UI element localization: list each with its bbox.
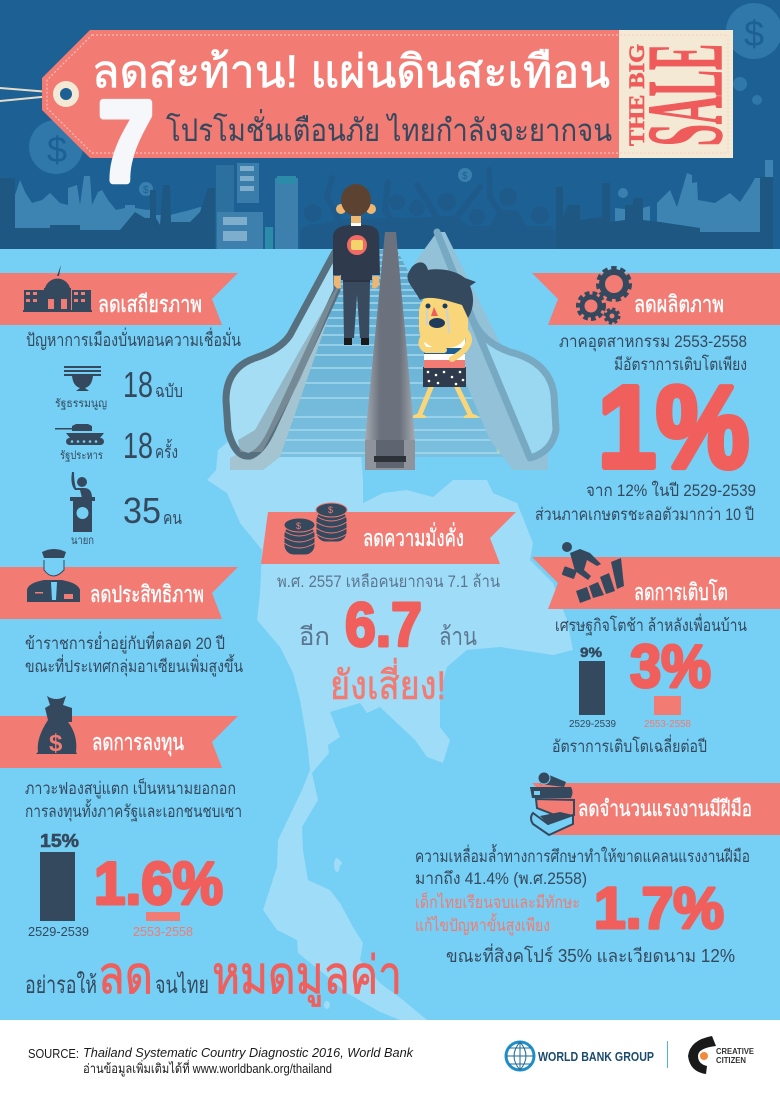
logo: World Bank Group xyxy=(506,1042,654,1070)
banner: investment: ลดการลงทุน xyxy=(92,729,184,756)
banner: stability: ลดเสถียรภาพ xyxy=(98,291,202,317)
banner: wealth: ลดความมั่งคั่ง xyxy=(363,522,464,551)
highlighted text xyxy=(415,891,580,936)
bar chart: economic growth: 2529-2539 xyxy=(569,719,616,730)
icon: tank xyxy=(55,424,104,445)
panel: reduced stability xyxy=(0,265,241,547)
body text xyxy=(25,777,242,822)
heading line one: ลดสะท้าน! แผ่นดินสะเทือน xyxy=(92,46,610,97)
icon: coin stacks: $ xyxy=(328,505,333,515)
crying boy xyxy=(407,262,478,417)
body text: ภาคอุตสาหกรรม 2553-2558 xyxy=(559,332,747,352)
highlighted text: เด็กไทยเรียนจบและมีทักษะ xyxy=(415,891,580,912)
source text: อ่านข้อมูลเพิ่มเติมได้ที่ www.worldbank.org/thailand xyxy=(83,1060,332,1077)
dollar coins in the sky: $ xyxy=(744,13,764,54)
closing slogan: หมดมูลค่า xyxy=(212,947,402,1007)
label: prime minister: นายก xyxy=(71,535,94,547)
panel: reduced productivity xyxy=(532,269,780,524)
map of Thailand xyxy=(207,440,573,1020)
closing slogan: อย่ารอให้ xyxy=(25,971,97,999)
safety strips xyxy=(274,400,500,457)
icon: parliament xyxy=(23,265,92,312)
logo: World Bank Group: WORLD BANK GROUP xyxy=(538,1049,654,1064)
banner: growth: ลดการเติบโต xyxy=(634,579,728,605)
the big sale stamp: THE BIG xyxy=(624,44,649,146)
steps xyxy=(270,250,510,457)
icon: coin stacks: $ xyxy=(296,521,301,531)
panel: reduced growth xyxy=(532,542,780,756)
body text: มีอัตราการเติบโตเพียง xyxy=(614,354,747,374)
stat: 18 coups: ครั้ง xyxy=(155,439,178,462)
dollar coins in the sky: $ xyxy=(462,171,468,182)
banner: productivity: ลดผลิตภาพ xyxy=(634,291,724,317)
banner: efficiency: ลดประสิทธิภาพ xyxy=(90,581,204,607)
crowd silhouettes xyxy=(300,170,556,249)
stat: 1.7 percent: 1.7% xyxy=(594,876,724,941)
right balustrade xyxy=(415,232,556,470)
ASEAN emblem xyxy=(347,235,367,255)
bar chart: investment growth: 2529-2539 xyxy=(28,924,89,939)
dollar coins in the sky xyxy=(29,3,780,198)
highlighted text: แก้ไขปัญหาขั้นสูงเพียง xyxy=(415,913,550,936)
dollar coins in the sky: $ xyxy=(47,129,67,170)
icon: officer xyxy=(27,549,80,602)
icon: podium speaker xyxy=(70,472,95,532)
closing slogan: ลด xyxy=(98,947,153,1005)
source text: Thailand Systematic Country Diagnostic 2016, World Bank xyxy=(83,1045,414,1060)
city buildings centre xyxy=(216,163,298,249)
skyline left xyxy=(0,176,215,249)
bar chart: investment growth: 2553-2558 xyxy=(133,924,193,939)
stat: 6.7 million: อีก xyxy=(299,623,330,651)
body text: ภาวะฟองสบู่แตก เป็นหนามยอกอก xyxy=(25,777,236,799)
panel: reduced efficiency xyxy=(0,549,243,677)
icon: coin stacks xyxy=(284,503,347,555)
body text xyxy=(25,631,243,677)
panel: reduced investment xyxy=(0,696,242,939)
body text xyxy=(535,480,756,524)
panel: reduced wealth xyxy=(261,503,516,708)
stat: 6.7 million: ล้าน xyxy=(439,623,477,651)
icon: constitution tray xyxy=(64,366,101,391)
icon: gears xyxy=(578,269,629,323)
stat: 6.7 million: 6.7 xyxy=(345,591,422,660)
label: constitution: รัฐธรรมนูญ xyxy=(55,398,107,410)
body text: ปัญหาการเมืองบั่นทอนความเชื่อมั่น xyxy=(26,327,241,350)
bar chart: economic growth xyxy=(569,633,711,730)
body text: มากถึง 41.4% (พ.ศ.2558) xyxy=(415,869,587,888)
man in ASEAN jacket xyxy=(333,184,380,345)
icon: climbing businessman xyxy=(562,542,624,603)
source text: SOURCE: xyxy=(28,1046,79,1061)
price tag with title xyxy=(0,30,745,204)
body text: พ.ศ. 2557 เหลือคนยากจน 7.1 ล้าน xyxy=(277,573,500,591)
stat: 35 prime ministers: คน xyxy=(163,508,182,528)
comparison text: ขณะที่สิงคโปร์ 35% และเวียดนาม 12% xyxy=(446,943,735,966)
stat: 18 constitutions xyxy=(123,364,183,405)
footer xyxy=(28,1036,755,1077)
stat: 18 coups: 18 xyxy=(123,425,153,466)
bar chart: economic growth: 9% xyxy=(580,644,603,660)
banner: wealth xyxy=(261,512,516,564)
source text xyxy=(28,1045,414,1077)
dollar coins in the sky: $ xyxy=(143,185,149,196)
skyline right xyxy=(556,160,773,249)
body text xyxy=(559,332,747,374)
warning text: ยังเสี่ยง! xyxy=(330,658,446,708)
escalator xyxy=(226,184,556,470)
body text xyxy=(415,844,750,888)
bar chart: investment growth: 15% xyxy=(40,831,79,851)
body text: ข้าราชการย่ำอยู่กับที่ตลอด 20 ปี xyxy=(25,631,225,654)
icon: stacked books xyxy=(530,772,574,835)
bar chart: economic growth: 2553-2558 xyxy=(644,719,691,730)
stat: 35 prime ministers: 35 xyxy=(123,490,161,531)
body text: ขณะที่ประเทศกลุ่มอาเซียนเพิ่มสูงขึ้น xyxy=(25,654,243,677)
banner: stability xyxy=(0,273,238,325)
stat: 6.7 million xyxy=(299,591,477,660)
banner: productivity xyxy=(532,273,780,325)
closing slogan: จนไทย xyxy=(155,971,209,999)
stat: 18 constitutions: 18 xyxy=(123,364,153,405)
body text: การลงทุนทั้งภาครัฐและเอกชนชบเซา xyxy=(25,799,242,822)
centre rail xyxy=(365,232,415,470)
stat: 18 constitutions: ฉบับ xyxy=(155,381,183,401)
logo: Creative Citizen: CITIZEN xyxy=(716,1056,746,1065)
body text: จาก 12% ในปี 2529-2539 xyxy=(586,480,756,500)
banner: investment xyxy=(0,716,238,768)
banner: efficiency xyxy=(0,567,238,619)
banner: skilled workforce xyxy=(532,783,780,835)
chart caption: อัตราการเติบโตเฉลี่ยต่อปี xyxy=(552,734,707,756)
bar chart: investment growth xyxy=(28,831,223,939)
logo: Creative Citizen xyxy=(688,1036,755,1074)
the big sale stamp xyxy=(624,44,745,146)
icon: money bag xyxy=(36,696,77,757)
panel: reduced skilled workforce xyxy=(415,772,780,966)
banner: growth xyxy=(532,557,780,609)
logo: Creative Citizen: CREATIVE xyxy=(716,1047,755,1056)
left balustrade xyxy=(226,250,345,470)
bar chart: investment growth: 1.6% xyxy=(94,850,223,917)
stat: 35 prime ministers xyxy=(123,490,182,531)
tag body xyxy=(42,30,733,158)
heading line two: โปรโมชั่นเตือนภัย ไทยกำลังจะยากจน xyxy=(166,109,612,148)
tag string xyxy=(0,88,62,101)
bar chart: economic growth: 3% xyxy=(630,633,711,700)
label: coup: รัฐประหาร xyxy=(60,450,103,462)
icon: money bag: $ xyxy=(49,730,63,757)
numeral seven: 7 xyxy=(99,79,153,204)
closing slogan xyxy=(25,947,402,1007)
stat: 1 percent: 1% xyxy=(598,362,749,492)
